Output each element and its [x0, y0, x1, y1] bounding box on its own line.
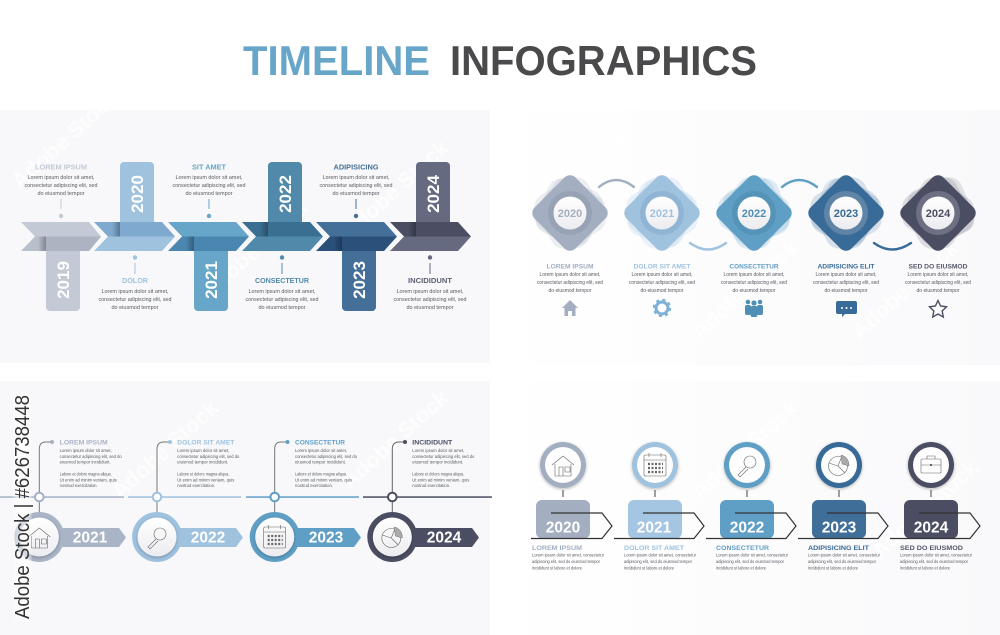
step 2024: 2024	[427, 530, 462, 546]
step 2021	[168, 162, 249, 311]
step 2024: adipiscing elit, sed do eiusmod tempor	[900, 559, 969, 564]
diamond 2020: LOREM IPSUM	[546, 264, 594, 270]
step 2021	[0, 440, 126, 562]
panel: arrow timeline	[21, 162, 471, 311]
step 2019: 2019	[54, 261, 73, 299]
step 2021: Lorem ipsum dolor sit amet, consectetur	[624, 552, 697, 558]
stock id label: Adobe Stock | #626738448	[12, 395, 34, 619]
step 2022	[242, 162, 323, 311]
step 2022: Lorem ipsum dolor sit amet,	[177, 448, 229, 453]
step 2021: Lorem ipsum dolor sit amet,	[60, 448, 112, 453]
step 2024: Lorem ipsum dolor sit amet,	[396, 289, 464, 295]
diamond 2020: do eiusmod tempor	[548, 288, 592, 294]
icon: pie chart	[828, 455, 849, 476]
step 2022: Lorem ipsum dolor sit amet,	[248, 289, 316, 295]
icon: gear	[654, 300, 670, 316]
step 2020: 2020	[128, 175, 147, 213]
icon: star	[930, 300, 946, 317]
step 2024	[890, 442, 980, 570]
panel: diamond timeline	[529, 172, 979, 317]
step 2021: adipiscing elit, sed do eiusmod tempor	[624, 559, 693, 564]
step 2024: INCIDIDUNT	[412, 440, 453, 446]
step 2021: Labore et dolore magna aliqua.	[60, 472, 112, 476]
step 2023: 2023	[822, 520, 857, 536]
step 2019: LOREM IPSUM	[35, 162, 87, 172]
icon: calendar	[644, 453, 666, 476]
step 2024: SED DO EIUSMOD	[900, 546, 964, 552]
diamond 2021	[621, 172, 703, 316]
diamond 2022: consectetur adipiscing elit, sed	[721, 280, 787, 286]
step 2020: 2020	[546, 520, 580, 536]
diamond 2024: Lorem ipsum dolor sit amet,	[908, 272, 968, 278]
diamond 2023	[805, 172, 887, 317]
step 2023: ADIPISICING ELIT	[808, 546, 869, 552]
step 2023: incididunt ut labore et dolore	[808, 566, 859, 570]
step 2024: Ut enim ad minim veniam, quis	[412, 477, 469, 482]
step 2022: CONSECTETUR	[716, 546, 770, 552]
icon: calendar	[264, 525, 286, 548]
step 2023	[798, 442, 888, 570]
step 2023: 2023	[309, 530, 344, 546]
step 2022: incididunt ut labore et dolore	[716, 566, 767, 570]
step 2024: consectetur adipiscing elit, sed do	[412, 454, 475, 459]
diamond 2024: do eiusmod tempor	[916, 288, 960, 294]
step 2021: 2021	[637, 520, 672, 536]
icon: chat bubble	[836, 301, 857, 317]
step 2023: Ut enim ad minim veniam, quis	[295, 477, 352, 482]
step 2022: 2022	[730, 520, 764, 536]
watermark pattern: Adobe Stock	[337, 135, 454, 244]
step 2023: Labore et dolore magna aliqua.	[295, 472, 347, 476]
diamond 2023: 2023	[834, 208, 858, 220]
diamond 2021: 2021	[650, 208, 674, 220]
diamond 2021: DOLOR SIT AMET	[634, 264, 691, 270]
diamond 2023: ADIPISICING ELIT	[818, 264, 875, 270]
step 2021: 2021	[202, 261, 221, 299]
step 2020: do eiusmod tempor	[112, 305, 159, 311]
step 2022: consectetur adipiscing elit, sed do	[177, 454, 240, 459]
diamond 2021: consectetur adipiscing elit, sed	[629, 280, 695, 286]
step 2021: Ut enim ad minim veniam, quis	[60, 477, 117, 482]
step 2024: Lorem ipsum dolor sit amet,	[412, 448, 464, 453]
watermark pattern: Adobe Stock	[107, 395, 224, 504]
watermark pattern: Adobe Stock	[337, 385, 454, 494]
watermark pattern: Adobe Stock	[687, 235, 804, 344]
icon: home	[562, 300, 578, 316]
step 2023: Lorem ipsum dolor sit amet, consectetur	[808, 552, 881, 558]
step 2023: do eiusmod tempor	[332, 191, 380, 197]
step 2023: consectetur adipiscing elit, sed do	[295, 454, 358, 459]
panel: circle ribbon timeline	[0, 440, 492, 562]
step 2024: INCIDIDUNT	[408, 276, 452, 285]
step 2024	[363, 440, 492, 562]
step 2024	[390, 162, 471, 311]
icon: house	[28, 528, 50, 548]
diamond 2024: consectetur adipiscing elit, sed	[905, 280, 971, 286]
diamond 2020: 2020	[558, 208, 582, 220]
step 2021: consectetur adipiscing elit, sed	[172, 183, 246, 189]
step 2024: do eiusmod tempor	[406, 305, 454, 311]
panel: badge and arrow timeline	[531, 442, 980, 570]
watermark pattern	[7, 85, 984, 564]
step 2022	[128, 440, 243, 562]
diamond 2020	[529, 172, 611, 316]
step 2020: LOREM IPSUM	[532, 546, 582, 552]
step 2019: consectetur adipiscing elit, sed	[24, 183, 98, 189]
step 2021: 2021	[73, 530, 108, 546]
step 2022: CONSECTETUR	[255, 276, 310, 285]
step 2021: do eiusmod tempor	[186, 191, 233, 197]
watermark pattern: Adobe Stock	[847, 235, 964, 344]
step 2024: eiusmod tempor incididunt.	[412, 460, 463, 465]
step 2020: consectetur adipiscing elit, sed	[98, 297, 172, 303]
step 2022: 2022	[276, 175, 295, 213]
watermark pattern: Adobe Stock	[867, 455, 984, 564]
step 2024: nostrud exercitation.	[412, 483, 450, 488]
icon: briefcase	[921, 456, 941, 473]
step 2022: Ut enim ad minim veniam, quis	[177, 477, 234, 482]
step 2022	[706, 442, 796, 570]
step 2019	[21, 162, 101, 311]
diamond 2022: 2022	[742, 208, 766, 220]
diamond 2023: do eiusmod tempor	[824, 288, 868, 294]
connector arcs	[599, 180, 911, 250]
step 2023: Lorem ipsum dolor sit amet,	[322, 175, 390, 181]
step 2021: nostrud exercitation.	[60, 483, 98, 488]
step 2023: Lorem ipsum dolor sit amet,	[295, 448, 347, 453]
step 2021: SIT AMET	[192, 162, 226, 172]
step 2023: nostrud exercitation.	[295, 483, 333, 488]
step 2023: 2023	[350, 261, 369, 299]
step 2020: Lorem ipsum dolor sit amet,	[102, 289, 168, 295]
title: INFOGRAPHICS	[450, 37, 757, 84]
step 2023: consectetur adipiscing elit, sed	[320, 183, 393, 189]
title	[243, 37, 757, 84]
step 2022: Labore et dolore magna aliqua.	[177, 472, 229, 476]
step 2021: consectetur adipiscing elit, sed do	[60, 454, 122, 459]
step 2024: Lorem ipsum dolor sit amet, consectetur	[900, 552, 973, 558]
diamond 2023: consectetur adipiscing elit, sed	[813, 280, 879, 286]
step 2019: Lorem ipsum dolor sit amet,	[28, 175, 94, 181]
step 2022: adipiscing elit, sed do eiusmod tempor	[716, 559, 785, 564]
diamond 2022: CONSECTETUR	[730, 264, 779, 270]
diamond 2021: Lorem ipsum dolor sit amet,	[632, 272, 692, 278]
watermark pattern: Adobe Stock	[517, 125, 634, 234]
step 2023: ADIPISICING	[334, 162, 379, 172]
step 2021	[614, 442, 704, 570]
step 2020: DOLOR	[122, 276, 149, 285]
diamond 2024: 2024	[926, 208, 951, 220]
watermark pattern: Adobe Stock	[197, 195, 314, 304]
step 2023: eiusmod tempor incididunt.	[295, 460, 346, 465]
step 2024: Labore et dolore magna aliqua.	[412, 472, 464, 476]
icon: pie chart	[382, 527, 402, 548]
step 2024: consectetur adipiscing elit, sed	[394, 297, 467, 303]
step 2023: CONSECTETUR	[295, 440, 346, 446]
icon: magnifier	[738, 456, 756, 477]
step 2024: 2024	[914, 520, 949, 536]
step 2019: do eiusmod tempor	[38, 191, 85, 197]
step 2022: DOLOR SIT AMET	[177, 440, 235, 446]
step 2021: incididunt ut labore et dolore	[624, 566, 675, 570]
step 2021: LOREM IPSUM	[60, 440, 108, 446]
icon: magnifier	[148, 528, 166, 549]
icon: house	[552, 456, 574, 476]
step 2022: 2022	[191, 530, 225, 546]
diamond 2022: do eiusmod tempor	[732, 288, 776, 294]
watermark pattern: Adobe Stock	[687, 395, 804, 504]
step 2022: nostrud exercitation.	[177, 483, 215, 488]
step 2020: incididunt ut labore et dolore	[532, 566, 583, 570]
step 2022: Lorem ipsum dolor sit amet, consectetur	[716, 552, 789, 558]
step 2022: consectetur adipiscing elit, sed	[246, 297, 319, 303]
diamond 2023: Lorem ipsum dolor sit amet,	[816, 272, 876, 278]
step 2023: adipiscing elit, sed do eiusmod tempor	[808, 559, 877, 564]
diamond 2021: do eiusmod tempor	[640, 288, 684, 294]
step 2023	[316, 162, 397, 311]
step 2024: incididunt ut labore et dolore	[900, 566, 951, 570]
step 2021: DOLOR SIT AMET	[624, 546, 684, 552]
watermark pattern: Adobe Stock	[7, 85, 124, 194]
step 2021: eiusmod tempor incididunt.	[60, 460, 111, 465]
title: TIMELINE	[243, 37, 430, 84]
watermark pattern: Adobe Stock	[517, 425, 634, 534]
diamond 2024	[897, 172, 979, 317]
diamond 2020: consectetur adipiscing elit, sed	[537, 280, 603, 286]
step 2024: 2024	[424, 175, 443, 213]
step 2020: adipiscing elit, sed do eiusmod tempor	[532, 559, 601, 564]
step 2020	[531, 442, 612, 570]
icon: people	[745, 300, 763, 317]
diamond 2022	[713, 172, 795, 317]
step 2020	[94, 162, 175, 311]
step 2020: Lorem ipsum dolor sit amet, consectetur	[532, 552, 605, 558]
step 2023	[246, 440, 361, 562]
diamond 2022: Lorem ipsum dolor sit amet,	[724, 272, 784, 278]
diamond 2024: SED DO EIUSMOD	[908, 264, 968, 270]
step 2022: do eiusmod tempor	[258, 305, 306, 311]
step 2021: Lorem ipsum dolor sit amet,	[176, 175, 242, 181]
diamond 2020: Lorem ipsum dolor sit amet,	[540, 272, 600, 278]
step 2022: eiusmod tempor incididunt.	[177, 460, 228, 465]
